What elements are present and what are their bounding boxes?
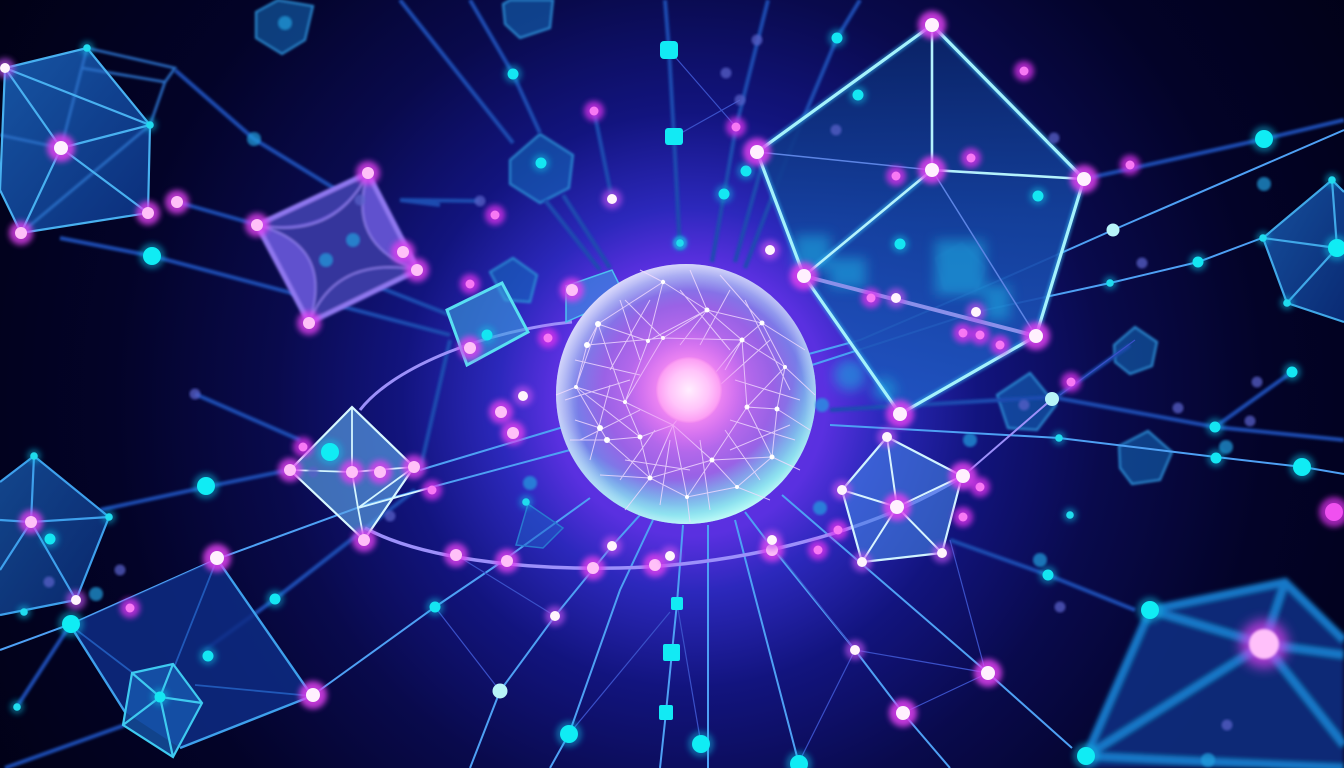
orbit ring: [360, 322, 1052, 568]
polyhedron: large bottom left: [70, 559, 312, 748]
nodes: cyan square: [659, 41, 683, 720]
node: large magenta right edge: [1319, 497, 1344, 527]
polyhedron: purple square: [257, 173, 418, 323]
sphere core: [627, 328, 751, 452]
polyhedron: right edge: [1263, 180, 1344, 322]
polyhedron: small cube bottom left: [123, 664, 202, 757]
nodes: white vertices with magenta glow: [19, 11, 1098, 727]
bottom right glow node: [1240, 620, 1288, 668]
glowing blobs inside polyhedron: [795, 235, 1010, 402]
network lines: faint cross-links: [435, 50, 1135, 762]
nodes: pink: [9, 161, 667, 580]
nodes: white: [0, 58, 986, 626]
polyhedron: small triangle below sphere: [516, 504, 563, 548]
polyhedron: left diamond: [290, 407, 430, 540]
faint background polyhedra: [256, 0, 1172, 484]
nodes: pale cyan: [492, 224, 1120, 698]
polyhedron: right pentagon: [842, 437, 962, 562]
sphere mesh: [556, 270, 815, 522]
sphere sparkle points: [574, 280, 787, 499]
polyhedron: top left: [0, 48, 175, 233]
polyhedron: small cube top of sphere: [566, 270, 625, 322]
sphere: [556, 264, 816, 524]
nodes: magenta: [120, 61, 1140, 618]
polyhedron: small cube by sphere: [447, 283, 528, 365]
polyhedron: large top right: [757, 25, 1084, 414]
polyhedron: bottom right: [1086, 582, 1344, 768]
polyhedron: left bottom: [0, 456, 109, 615]
